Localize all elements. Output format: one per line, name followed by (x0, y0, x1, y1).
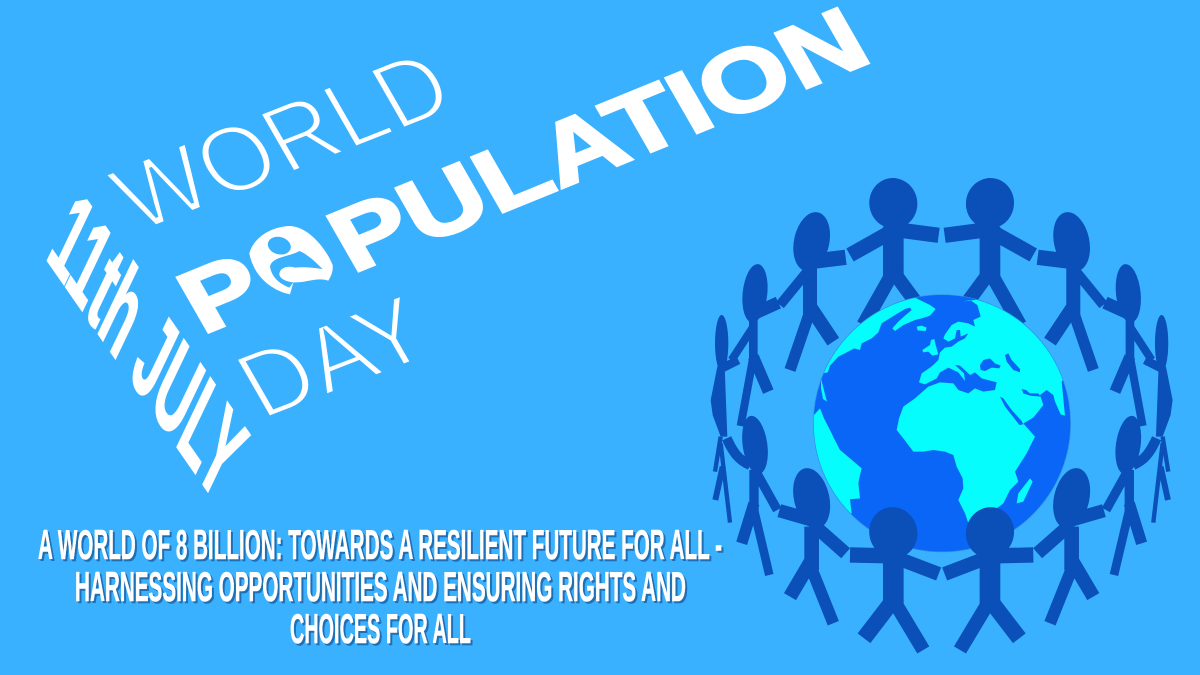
right upper figures (945, 174, 1173, 523)
inland seas (980, 353, 1041, 425)
land: Greenland and North America (815, 298, 938, 402)
figure: top right (945, 174, 1033, 325)
figure: upper right middle (1038, 209, 1103, 370)
figure: lower right outer (1106, 414, 1157, 575)
figures in front of the globe (727, 414, 1157, 650)
figure: upper left middle (780, 209, 846, 370)
icon: mother and child logo inside the letter O (249, 226, 333, 294)
figures behind the globe (711, 174, 1173, 523)
figure: bottom right (945, 502, 1033, 650)
figure: upper left outer (732, 263, 778, 426)
continents (810, 295, 1080, 525)
figure: lower left middle (779, 464, 846, 623)
heading: WORLD: WORLD (95, 31, 469, 252)
subtitle text block: CHOICES FOR ALL (290, 605, 471, 652)
subtitle text block (38, 521, 722, 652)
figure: far left (711, 315, 738, 523)
figure: lower right middle (1038, 464, 1104, 623)
heading: DAY: DAY (218, 276, 447, 439)
figure: far right (1145, 315, 1173, 523)
figure: upper right outer (1105, 263, 1152, 426)
figure: lower left outer (727, 414, 777, 575)
left lower figures (727, 414, 939, 650)
heading: POPULATION: POPULATION (161, 0, 885, 353)
figure: top left (850, 174, 939, 325)
left upper figures (711, 174, 939, 523)
globe (810, 295, 1080, 552)
land: Europe, Asia and Africa (896, 300, 1065, 523)
figure: bottom left (850, 502, 939, 650)
right lower figures (945, 414, 1157, 650)
land: South America (814, 408, 862, 514)
